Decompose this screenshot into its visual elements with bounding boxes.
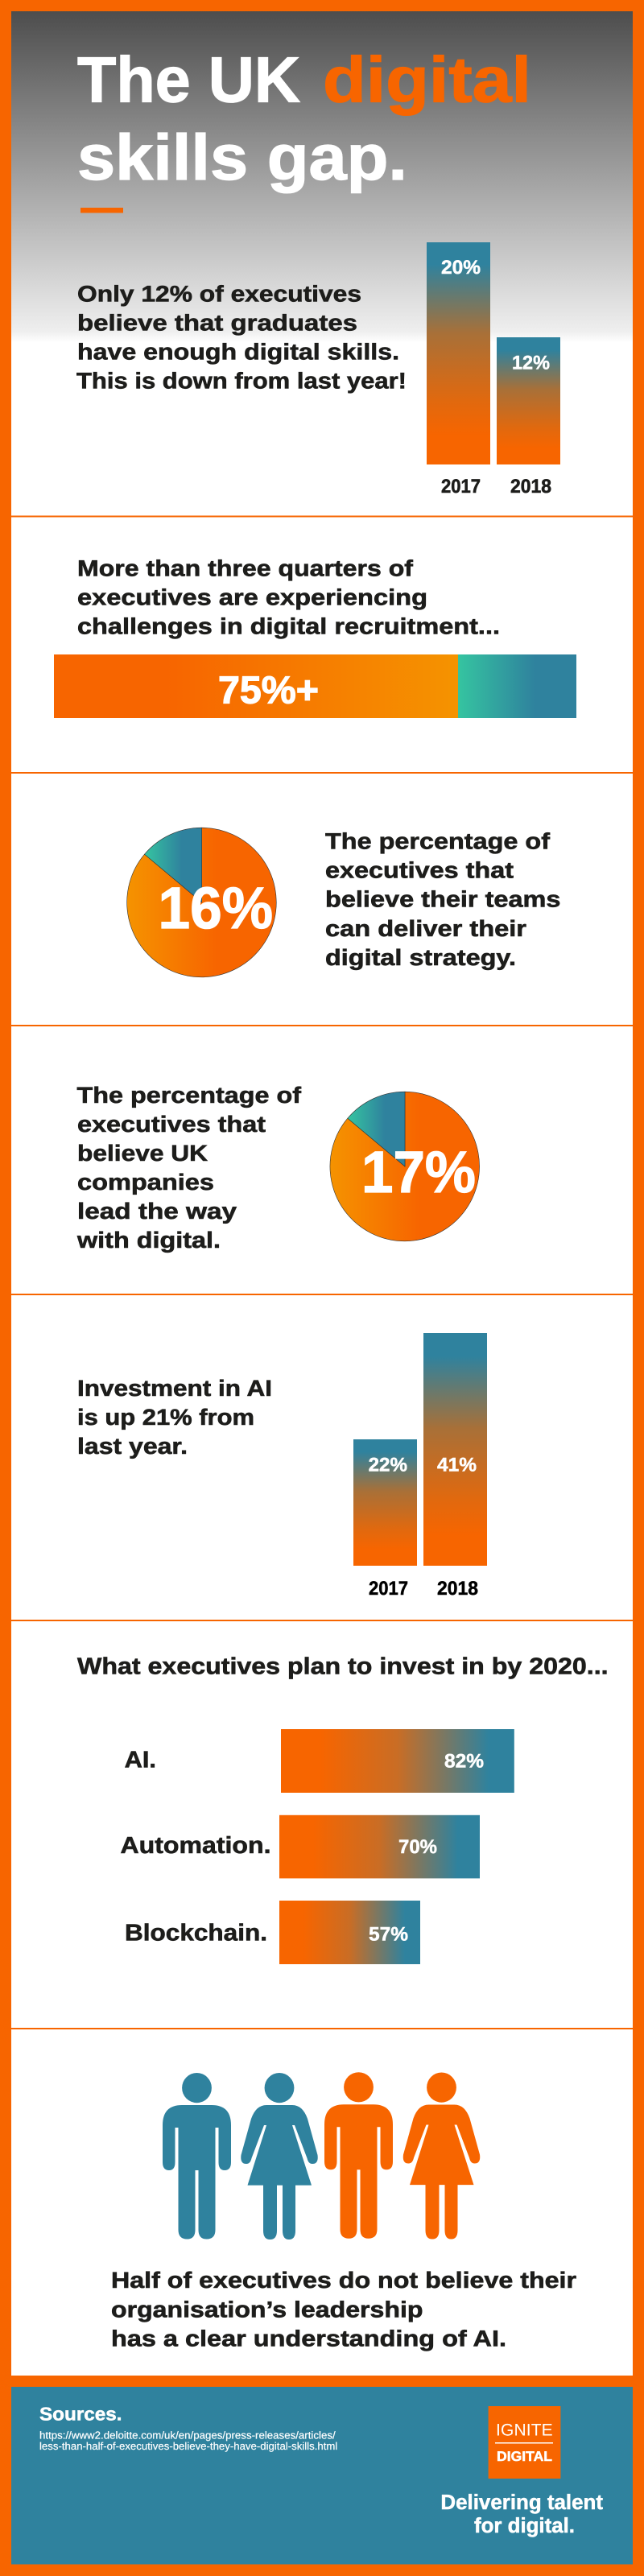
text block: digital strategy. bbox=[325, 945, 516, 970]
sources heading: Sources. bbox=[39, 2404, 122, 2425]
panel: graduates digital skills bbox=[76, 242, 560, 497]
bar: Automation 70%: Automation. bbox=[121, 1833, 270, 1859]
panel: AI investment bbox=[77, 1333, 487, 1600]
title: digital bbox=[323, 43, 531, 116]
bar chart: 2017 vs 2018: 12% bbox=[512, 353, 550, 374]
bar chart: AI investment: 22% bbox=[369, 1455, 407, 1476]
panel: leadership understanding of AI bbox=[111, 2072, 576, 2351]
sources link: https://www2.deloitte.com/uk/en/pages/press-releases/articles/ bbox=[39, 2429, 336, 2441]
bar chart: 2017 vs 2018: 20% bbox=[441, 257, 481, 279]
bar: AI 82% bbox=[125, 1729, 514, 1793]
text block: believe that graduates bbox=[77, 310, 357, 335]
text block: organisation’s leadership bbox=[111, 2297, 423, 2322]
text block: This is down from last year! bbox=[76, 369, 407, 394]
text block: executives that bbox=[77, 1112, 266, 1137]
icon: woman orange bbox=[403, 2072, 480, 2240]
text block: can deliver their bbox=[325, 916, 526, 941]
progress bar 75%+ bbox=[54, 654, 576, 718]
text block: executives are experiencing bbox=[77, 584, 427, 610]
icon: woman teal bbox=[241, 2073, 318, 2240]
text block: has a clear understanding of AI. bbox=[111, 2326, 506, 2351]
bar: Blockchain 57%: Blockchain. bbox=[125, 1921, 267, 1946]
panel: investment plans bbox=[77, 1654, 609, 1964]
bar chart: AI investment: 41% bbox=[437, 1455, 477, 1476]
text block bbox=[77, 1376, 272, 1459]
bar: AI 82%: AI. bbox=[125, 1748, 156, 1773]
panel: teams deliver strategy bbox=[127, 828, 560, 977]
text block bbox=[325, 829, 560, 970]
bar chart: 2017 vs 2018: 2017 bbox=[441, 476, 481, 497]
bar: AI 82%: 82% bbox=[444, 1751, 484, 1773]
text block bbox=[76, 281, 407, 394]
text block bbox=[77, 555, 500, 639]
icon: man teal bbox=[163, 2073, 231, 2240]
text block: Half of executives do not believe their bbox=[111, 2268, 576, 2293]
text block: last year. bbox=[77, 1434, 188, 1459]
tagline bbox=[440, 2490, 603, 2537]
sources link: less-than-half-of-executives-believe-they-have-digital-skills.html bbox=[39, 2440, 337, 2452]
title: The UK bbox=[77, 43, 300, 116]
text block: with digital. bbox=[76, 1228, 221, 1253]
bar: Automation 70%: 70% bbox=[398, 1836, 437, 1858]
text block: have enough digital skills. bbox=[77, 340, 399, 364]
title: skills gap. bbox=[77, 122, 407, 193]
bar: Automation 70% bbox=[121, 1815, 480, 1878]
bar: Blockchain 57%: 57% bbox=[369, 1924, 408, 1946]
title bbox=[77, 43, 531, 193]
bar: Blockchain 57% bbox=[125, 1901, 420, 1964]
text block: challenges in digital recruitment... bbox=[77, 614, 500, 639]
text block bbox=[76, 1083, 302, 1253]
text block: companies bbox=[77, 1170, 214, 1195]
title accent bar bbox=[80, 208, 123, 213]
bar chart: 2017 vs 2018: 2018 bbox=[510, 476, 551, 497]
logo: Ignite Digital bbox=[489, 2406, 560, 2479]
bar chart: AI investment: 2017 bbox=[369, 1578, 408, 1600]
text block: lead the way bbox=[77, 1199, 237, 1224]
pie chart 16% bbox=[127, 828, 276, 977]
icon: four people bbox=[163, 2072, 480, 2240]
logo: Ignite Digital: DIGITAL bbox=[497, 2449, 552, 2464]
header bbox=[77, 43, 531, 213]
pie chart 17%: 17% bbox=[361, 1140, 476, 1205]
sources link bbox=[39, 2429, 337, 2452]
panel: digital recruitment bbox=[54, 555, 576, 718]
progress bar 75%+: 75%+ bbox=[218, 669, 319, 712]
tagline: Delivering talent bbox=[440, 2490, 603, 2514]
tagline: for digital. bbox=[474, 2513, 575, 2537]
text block: Only 12% of executives bbox=[77, 281, 361, 306]
bar chart: AI investment: 2018 bbox=[437, 1578, 478, 1600]
bar chart: 2017 vs 2018 bbox=[427, 242, 560, 497]
text block: believe their teams bbox=[325, 887, 560, 912]
heading: What executives plan to invest in by 2020... bbox=[77, 1654, 609, 1680]
pie chart 16%: 16% bbox=[158, 876, 273, 941]
text block: More than three quarters of bbox=[77, 555, 414, 581]
text block: believe UK bbox=[77, 1141, 208, 1166]
text block: The percentage of bbox=[77, 1083, 302, 1108]
text block: The percentage of bbox=[325, 829, 551, 854]
panel: UK companies lead bbox=[76, 1083, 480, 1253]
icon: man orange bbox=[324, 2072, 393, 2239]
text block: executives that bbox=[325, 858, 514, 883]
logo: Ignite Digital: IGNITE bbox=[496, 2421, 553, 2440]
pie chart 17% bbox=[330, 1092, 480, 1241]
text block bbox=[111, 2268, 576, 2351]
bar chart: AI investment bbox=[353, 1333, 487, 1600]
text block: Investment in AI bbox=[77, 1376, 272, 1401]
text block: is up 21% from bbox=[77, 1405, 254, 1430]
footer panel bbox=[11, 2387, 633, 2565]
